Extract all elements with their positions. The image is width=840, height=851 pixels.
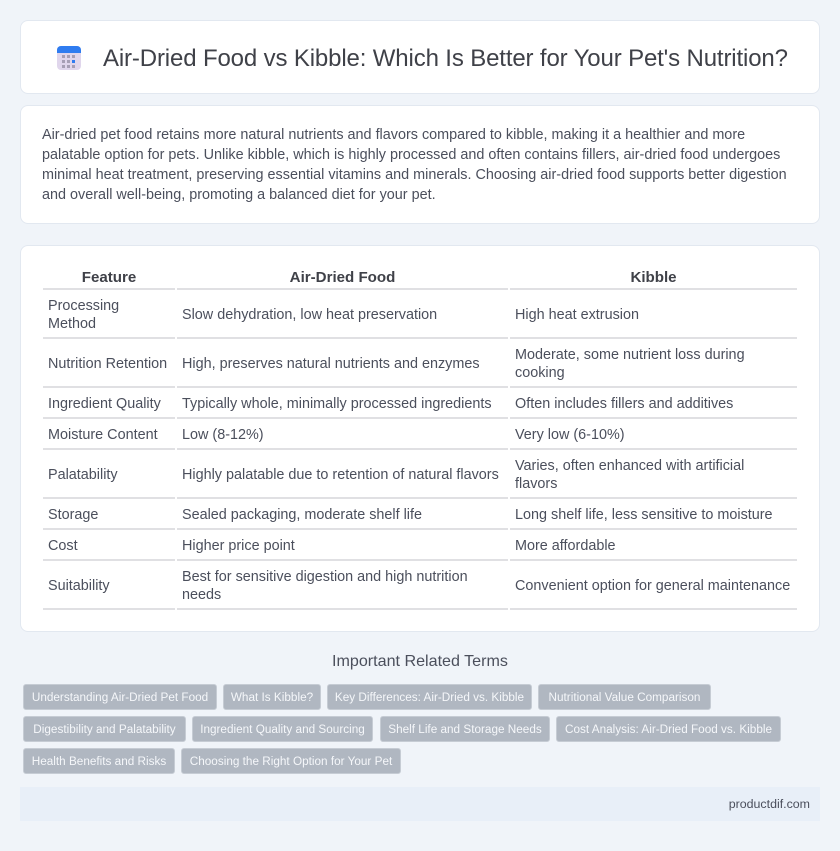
related terms tags: Health Benefits and Risks <box>32 755 166 768</box>
comparison table: Nutrition Retention <box>48 356 167 372</box>
intro text <box>42 127 787 203</box>
intro text: minimal heat treatment, preserving essential vitamins and minerals. Choosing air-dried food supports better digestion <box>42 167 787 183</box>
comparison table: Palatability <box>48 467 118 483</box>
comparison table: Feature <box>82 269 136 286</box>
related terms tags: Understanding Air-Dried Pet Food <box>32 691 208 704</box>
related terms tags: Nutritional Value Comparison <box>549 691 700 704</box>
comparison table: High heat extrusion <box>515 307 639 323</box>
related terms tags: What Is Kibble? <box>231 691 313 704</box>
intro text: and overall well-being, promoting a balanced diet for your pet. <box>42 187 436 203</box>
related terms tags: Cost Analysis: Air-Dried Food vs. Kibble <box>565 723 772 736</box>
related terms tags: Shelf Life and Storage Needs <box>388 723 542 736</box>
comparison table: Storage <box>48 507 98 523</box>
comparison table: Very low (6-10%) <box>515 427 625 443</box>
comparison table: Low (8-12%) <box>182 427 264 443</box>
comparison table: Typically whole, minimally processed ingredients <box>182 396 492 412</box>
related terms tags: Digestibility and Palatability <box>33 723 176 736</box>
related terms tags: Choosing the Right Option for Your Pet <box>190 755 392 768</box>
comparison table: Long shelf life, less sensitive to moisture <box>515 507 773 523</box>
comparison table: Sealed packaging, moderate shelf life <box>182 507 422 523</box>
comparison table: Moderate, some nutrient loss during <box>515 347 745 363</box>
comparison table: Highly palatable due to retention of natural flavors <box>182 467 499 483</box>
related terms tags: Ingredient Quality and Sourcing <box>200 723 365 736</box>
intro text: palatable option for pets. Unlike kibble, which is highly processed and often contains fillers, air-dried food undergoes <box>42 147 780 163</box>
intro text: Air-dried pet food retains more natural nutrients and flavors compared to kibble, making it a healthier and more <box>42 127 745 143</box>
comparison table: Cost <box>48 538 78 554</box>
footer source: productdif.com <box>729 797 810 811</box>
comparison table: Ingredient Quality <box>48 396 161 412</box>
footer bar <box>20 787 820 821</box>
comparison table: Higher price point <box>182 538 295 554</box>
related terms heading: Important Related Terms <box>332 652 508 670</box>
comparison table: Moisture Content <box>48 427 158 443</box>
title: Air-Dried Food vs Kibble: Which Is Better for Your Pet's Nutrition? <box>103 45 788 72</box>
comparison table: Processing <box>48 298 119 314</box>
comparison table: Best for sensitive digestion and high nutrition <box>182 569 468 585</box>
comparison table: Varies, often enhanced with artificial <box>515 458 744 474</box>
comparison table: Often includes fillers and additives <box>515 396 733 412</box>
comparison table: Convenient option for general maintenance <box>515 578 790 594</box>
comparison table: High, preserves natural nutrients and enzymes <box>182 356 480 372</box>
icon: calendar <box>57 46 81 70</box>
comparison table: Slow dehydration, low heat preservation <box>182 307 437 323</box>
related terms tags: Key Differences: Air-Dried vs. Kibble <box>335 691 524 704</box>
comparison table: Suitability <box>48 578 110 594</box>
comparison table: cooking <box>515 365 565 381</box>
related terms tags <box>23 684 781 774</box>
comparison table: Air-Dried Food <box>290 269 395 286</box>
comparison table: Method <box>48 316 96 332</box>
header panel <box>20 20 820 94</box>
comparison table: More affordable <box>515 538 616 554</box>
comparison table: flavors <box>515 476 557 492</box>
comparison table panel <box>20 245 820 632</box>
comparison table: needs <box>182 587 221 603</box>
intro panel <box>20 105 820 224</box>
comparison table <box>43 269 797 610</box>
comparison table: Kibble <box>630 269 677 286</box>
